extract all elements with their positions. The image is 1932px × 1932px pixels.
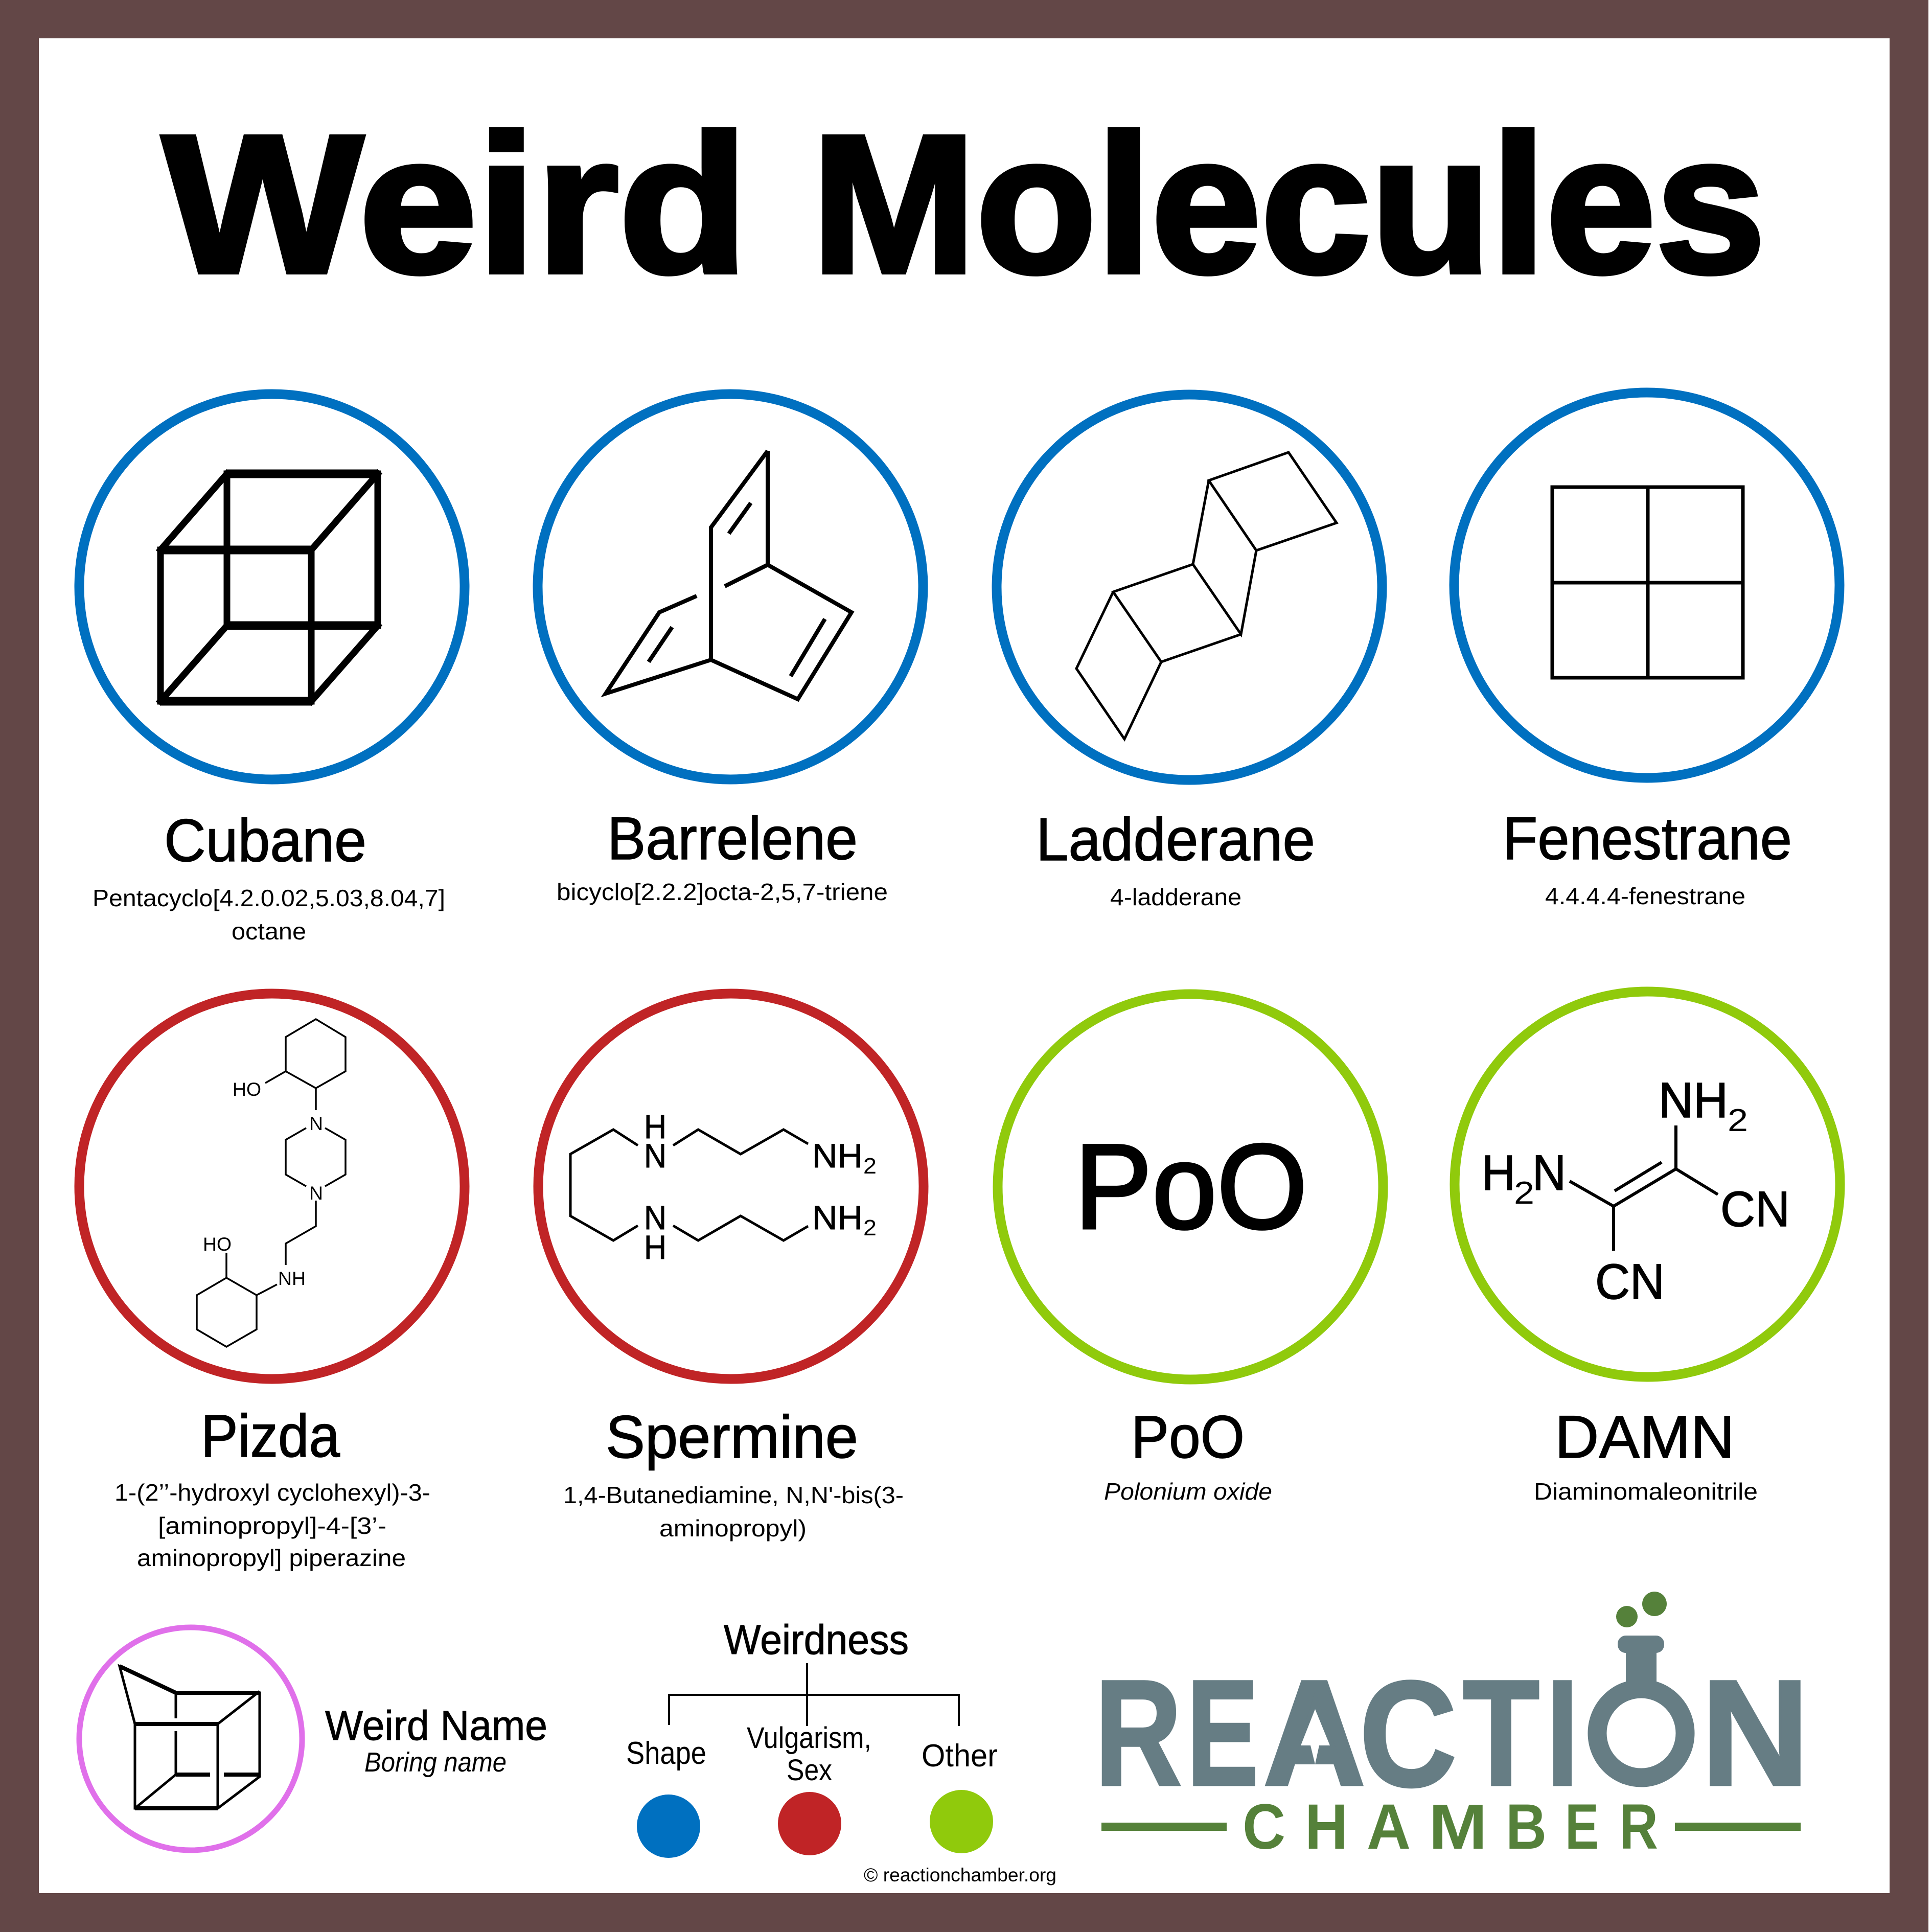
icon: ladderane structure: [1076, 452, 1337, 739]
icon: pizda structure: [197, 1019, 346, 1347]
systematic name: 4-ladderane: [1110, 884, 1241, 910]
logo wordmark: reaction: R: [1095, 1649, 1182, 1817]
copyright: © reactionchamber.org: [864, 1865, 1056, 1885]
systematic name: octane: [232, 918, 306, 945]
logo wordmark: chamber: R: [1619, 1791, 1658, 1862]
icon: pizda structure: NH: [278, 1268, 306, 1289]
icon: pizda structure: N: [309, 1113, 323, 1134]
logo wordmark: reaction: C: [1360, 1650, 1457, 1818]
icon: pizda structure: HO: [233, 1079, 261, 1100]
icon: spermine structure: 2: [863, 1215, 877, 1240]
name: Barrelene: [607, 805, 858, 872]
logo wordmark: reaction: A: [1263, 1649, 1366, 1817]
systematic name: [563, 1482, 904, 1542]
tree connector: [669, 1663, 959, 1726]
icon: spermine structure: NH: [812, 1199, 863, 1236]
icon: DAMN structure: N: [1532, 1145, 1566, 1201]
icon: DAMN structure: H: [1482, 1145, 1515, 1201]
systematic name: Polonium oxide: [1104, 1478, 1272, 1505]
icon: spermine structure: H: [644, 1228, 666, 1266]
category: vulgarism, sex: [747, 1721, 871, 1855]
systematic name: Pentacyclo[4.2.0.02,5.03,8.04,7]: [93, 885, 445, 911]
category: shape: [626, 1736, 706, 1858]
circle: other category: [998, 994, 1383, 1379]
legend: weirdness categories: [626, 1617, 998, 1858]
logo wordmark: chamber: E: [1565, 1791, 1599, 1862]
icon: spermine structure: 2: [863, 1154, 877, 1179]
category: vulgarism, sex: Vulgarism,: [747, 1721, 871, 1755]
circle: other category: [1455, 992, 1840, 1377]
logo wordmark: chamber: [1243, 1791, 1658, 1862]
panel: pizda: [79, 994, 465, 1571]
logo wordmark: chamber: H: [1305, 1791, 1348, 1862]
icon: barrelene structure: [606, 451, 852, 699]
systematic name: bicyclo[2.2.2]octa-2,5,7-triene: [557, 879, 888, 905]
icon: DAMN structure: NH: [1659, 1072, 1728, 1128]
logo wordmark: chamber: A: [1367, 1791, 1411, 1862]
logo: reaction chamber: [1095, 1592, 1809, 1862]
heading: Weirdness: [724, 1617, 909, 1663]
icon: spermine structure: N: [644, 1137, 666, 1175]
weird name: Weird Name: [325, 1703, 547, 1749]
systematic name: [aminopropyl]-4-[3’-: [158, 1512, 386, 1539]
title: [163, 95, 1765, 314]
icon: spermine structure: NH: [812, 1137, 863, 1175]
name: Fenestrane: [1503, 805, 1792, 872]
icon: DAMN structure: 2: [1728, 1103, 1748, 1138]
icon: pizda structure: N: [309, 1183, 323, 1204]
icon: DAMN structure: 2: [1514, 1176, 1534, 1211]
circle: vulgarism category: [538, 994, 924, 1379]
name: Spermine: [606, 1404, 858, 1471]
icon: fenestrane structure: [1552, 487, 1743, 678]
systematic name: 1,4-Butanediamine, N,N'-bis(3-: [563, 1482, 904, 1508]
logo wordmark: reaction: I: [1547, 1649, 1578, 1817]
logo wordmark: reaction: [1095, 1649, 1809, 1818]
icon: spermine structure: H: [644, 1108, 666, 1145]
circle: vulgarism category: [79, 994, 465, 1379]
systematic name: [114, 1479, 430, 1571]
icon: DAMN structure: CN: [1720, 1181, 1790, 1237]
name: DAMN: [1555, 1404, 1735, 1471]
icon: pizda structure: HO: [203, 1234, 232, 1255]
icon: example molecule: [120, 1666, 260, 1808]
logo wordmark: chamber: B: [1506, 1791, 1547, 1862]
icon: cubane structure: [160, 474, 378, 701]
name: Pizda: [201, 1402, 340, 1470]
icon: DAMN structure: CN: [1595, 1254, 1665, 1309]
category: other: Other: [922, 1738, 998, 1774]
title: Molecules: [812, 95, 1765, 314]
icon: DAMN structure: [1482, 1072, 1790, 1309]
circle: shape category: [1454, 393, 1839, 778]
icon: bubbles: [1616, 1592, 1667, 1627]
logo wordmark: reaction: T: [1463, 1649, 1539, 1817]
logo wordmark: reaction: E: [1187, 1649, 1258, 1817]
systematic name: Diaminomaleonitrile: [1534, 1478, 1758, 1505]
systematic name: aminopropyl): [659, 1515, 807, 1542]
circle: shape category: [997, 395, 1382, 780]
panel: cubane: [79, 394, 465, 945]
icon: PoO formula: PoO: [1074, 1119, 1307, 1254]
category: shape: Shape: [626, 1736, 706, 1771]
boring name: Boring name: [364, 1747, 507, 1778]
name: PoO: [1131, 1404, 1245, 1471]
panel: damn: [1455, 992, 1840, 1505]
systematic name: aminopropyl] piperazine: [137, 1545, 406, 1571]
panel: polonium oxide: [998, 994, 1383, 1505]
panel: barrelene: [538, 394, 923, 905]
circle: shape category: [538, 394, 923, 779]
logo wordmark: reaction: N: [1701, 1649, 1809, 1817]
logo rules: [1101, 1823, 1801, 1831]
name: Ladderane: [1036, 806, 1315, 873]
icon: spermine structure: [570, 1108, 877, 1266]
logo wordmark: chamber: M: [1429, 1791, 1487, 1862]
icon: spermine structure: N: [644, 1199, 666, 1236]
systematic name: 1-(2’’-hydroxyl cyclohexyl)-3-: [114, 1479, 430, 1506]
circle: shape category: [79, 394, 465, 779]
circle: example: [79, 1627, 302, 1850]
title: Weird: [163, 95, 748, 314]
panel: fenestrane: [1454, 393, 1839, 909]
logo wordmark: chamber: C: [1243, 1791, 1285, 1862]
category: other: [922, 1738, 998, 1853]
panel: spermine: [538, 994, 924, 1542]
systematic name: 4.4.4.4-fenestrane: [1545, 883, 1745, 909]
name: Cubane: [164, 807, 366, 875]
panel: ladderane: [997, 395, 1382, 910]
legend: example entry: [79, 1627, 547, 1850]
category: vulgarism, sex: Sex: [787, 1754, 832, 1787]
icon: flask: [1597, 1636, 1685, 1778]
systematic name: [93, 885, 445, 945]
